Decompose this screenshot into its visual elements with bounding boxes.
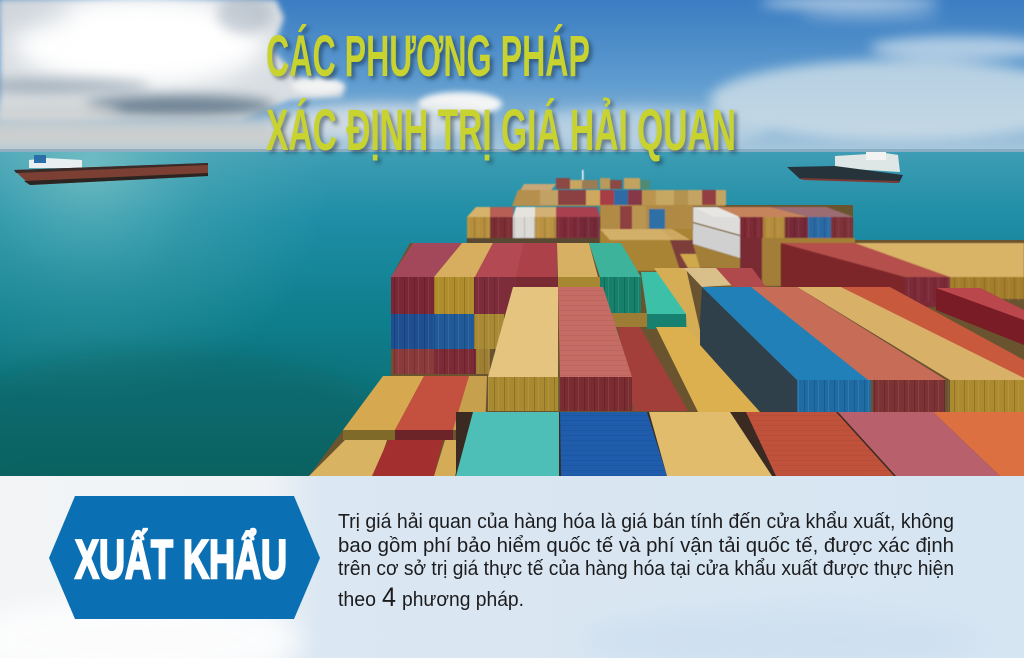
container ship: hull underlay — [309, 205, 1024, 476]
intro paragraph: bao gồm phí bảo hiểm quốc tế và phí vận tải quốc tế, được xác định — [338, 535, 954, 557]
container ship: centre left stack — [391, 243, 766, 374]
container ship: lower left containers — [309, 376, 487, 476]
container ship: far stacks — [512, 170, 726, 230]
badge: xuất khẩu: XUẤT KHẨU — [75, 528, 287, 590]
badge: xuất khẩu — [49, 496, 320, 619]
intro paragraph: 4 — [382, 582, 396, 612]
photo: sky with clouds — [0, 0, 1024, 153]
container ship: front centre containers — [488, 287, 766, 420]
container ship: right far stack — [781, 243, 1024, 307]
lower panel background — [0, 476, 1024, 658]
left tanker ship — [14, 155, 208, 185]
container ship: foreground containers — [456, 412, 1024, 476]
intro paragraph: theo — [338, 589, 376, 611]
right cargo ship — [787, 152, 903, 183]
intro paragraph — [338, 511, 954, 612]
container ship: white and right upper stacks — [600, 207, 855, 286]
intro paragraph: phương pháp. — [402, 589, 524, 611]
intro paragraph: trên cơ sở trị giá thực tế của hàng hóa tại cửa khẩu xuất được thực hiện — [338, 558, 954, 580]
container ship: upper left row — [467, 207, 600, 244]
photo: sea — [0, 152, 1024, 510]
title — [266, 24, 736, 163]
title: CÁC PHƯƠNG PHÁP — [266, 24, 590, 89]
container ship: right long containers — [700, 287, 1024, 412]
intro paragraph: Trị giá hải quan của hàng hóa là giá bán tính đến cửa khẩu xuất, không — [338, 511, 954, 533]
